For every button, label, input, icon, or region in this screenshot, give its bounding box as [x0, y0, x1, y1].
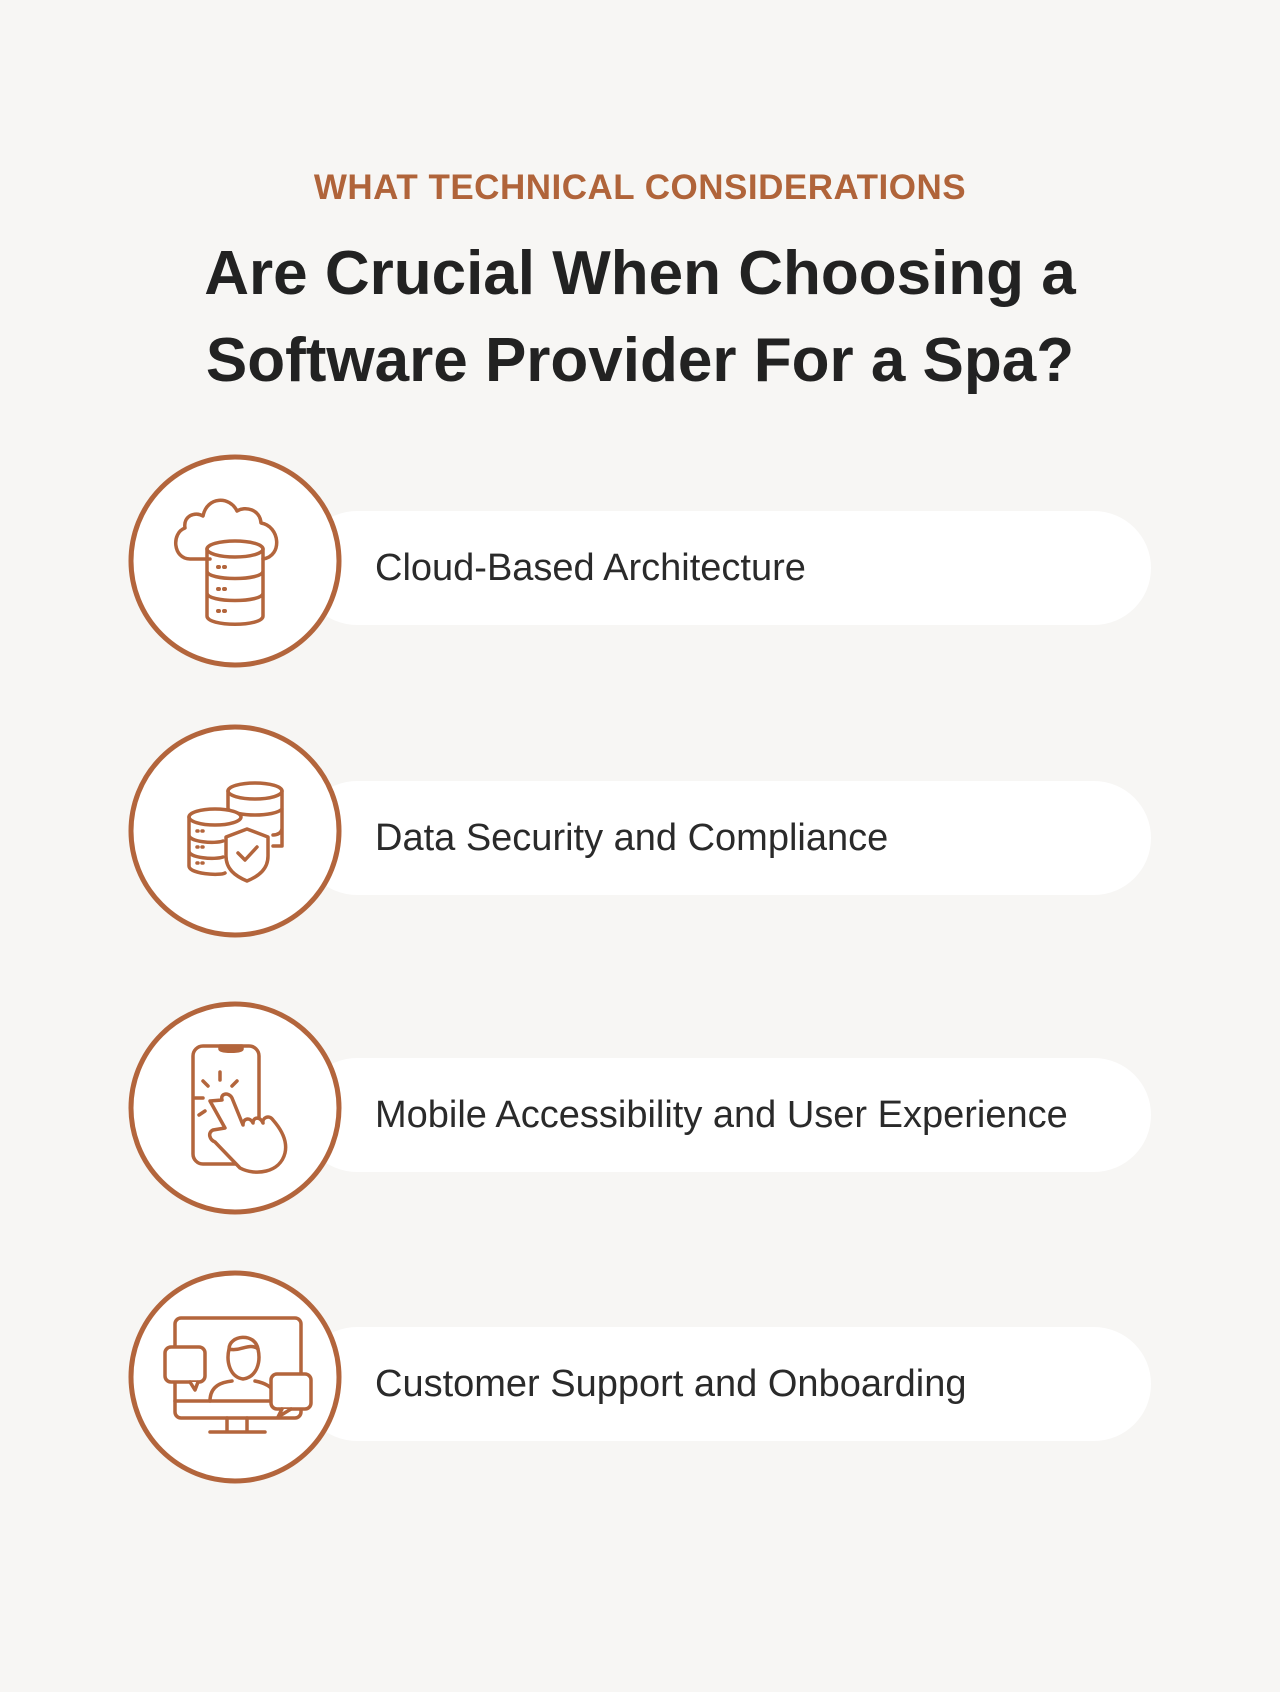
title [204, 239, 1076, 395]
title: Are Crucial When Choosing a [204, 239, 1076, 308]
icon: video support [131, 1273, 339, 1481]
pill: mobile [300, 1058, 1151, 1172]
title: Software Provider For a Spa? [206, 326, 1074, 395]
icon: database shield [131, 727, 339, 935]
pill: support: Customer Support and Onboarding [375, 1363, 966, 1405]
subtitle: WHAT TECHNICAL CONSIDERATIONS [314, 168, 966, 207]
icon: mobile touch [131, 1004, 339, 1212]
pill: support [300, 1327, 1151, 1441]
pill: security [300, 781, 1151, 895]
pill: security: Data Security and Compliance [375, 817, 888, 859]
icon: cloud database [131, 457, 339, 665]
pill: cloud: Cloud-Based Architecture [375, 547, 806, 589]
pill: cloud [300, 511, 1151, 625]
pill: mobile: Mobile Accessibility and User Experience [375, 1094, 1068, 1136]
